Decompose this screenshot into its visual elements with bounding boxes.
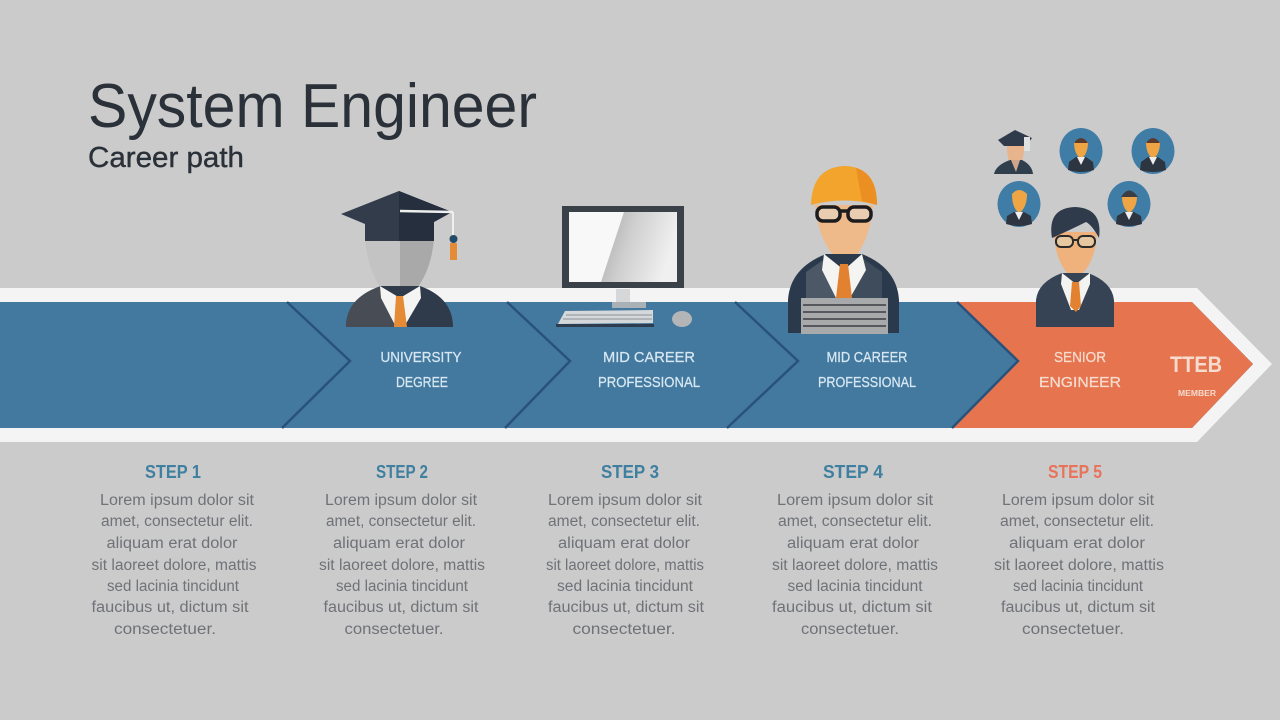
icon: team member 2 — [1132, 128, 1174, 174]
career path arrow — [0, 288, 1272, 442]
stage label: senior engineer: ENGINEER — [1039, 374, 1121, 391]
step 4 text: faucibus ut, dictum sit — [772, 599, 933, 616]
step 2 text — [319, 462, 485, 638]
step 3 text: faucibus ut, dictum sit — [548, 599, 705, 616]
step 3 text — [546, 462, 705, 638]
step 2 text: aliquam erat dolor — [333, 535, 465, 552]
icon: computer — [556, 206, 692, 327]
subtitle: Career path — [88, 142, 244, 174]
step 3 text: Lorem ipsum dolor sit — [548, 492, 703, 509]
step 4 text: sed lacinia tincidunt — [788, 578, 923, 595]
step 1 text: aliquam erat dolor — [106, 535, 238, 552]
stage label: university degree — [380, 349, 462, 391]
step 1 text: STEP 1 — [145, 462, 201, 482]
stage label: university degree: DEGREE — [396, 374, 448, 391]
stage label: senior engineer — [1039, 349, 1121, 391]
title: System Engineer — [88, 72, 537, 141]
stage label: university degree: UNIVERSITY — [380, 349, 462, 366]
step 2 text: STEP 2 — [376, 462, 428, 482]
step 3 text: consectetuer. — [572, 621, 676, 638]
step 5 text: STEP 5 — [1048, 462, 1102, 482]
step 1 text — [92, 462, 257, 638]
step 5 text: Lorem ipsum dolor sit — [1002, 492, 1155, 509]
step 1 text: consectetuer. — [114, 621, 216, 638]
step 3 text: aliquam erat dolor — [558, 535, 690, 552]
step 1 text: sit laoreet dolore, mattis — [92, 557, 257, 574]
step 3 text: STEP 3 — [601, 462, 659, 482]
stage label: mid career professional — [598, 349, 700, 391]
step 2 text: sed lacinia tincidunt — [336, 578, 469, 595]
step 4 text: consectetuer. — [801, 621, 899, 638]
stage label: mid career engineer: MID CAREER — [826, 349, 908, 366]
badge: top tier: TTEB — [1170, 352, 1222, 377]
step 2 text: Lorem ipsum dolor sit — [325, 492, 478, 509]
stage label: mid career engineer — [818, 349, 916, 391]
step 5 text: sed lacinia tincidunt — [1013, 578, 1144, 595]
step 3 text: amet, consectetur elit. — [548, 513, 700, 530]
step 2 text: consectetuer. — [344, 621, 444, 638]
icon: engineer with hard hat — [788, 166, 899, 334]
step 5 text — [994, 462, 1164, 638]
step 5 text: faucibus ut, dictum sit — [1001, 599, 1156, 616]
step 5 text: aliquam erat dolor — [1009, 535, 1145, 552]
step 1 text: amet, consectetur elit. — [101, 513, 253, 530]
icon: graduate — [341, 191, 458, 327]
step 4 text: amet, consectetur elit. — [778, 513, 932, 530]
step 1 text: faucibus ut, dictum sit — [92, 599, 249, 616]
step 5 text: amet, consectetur elit. — [1000, 513, 1154, 530]
step 5 text: consectetuer. — [1022, 621, 1124, 638]
step 5 text: sit laoreet dolore, mattis — [994, 557, 1164, 574]
step 4 text: aliquam erat dolor — [787, 535, 919, 552]
icon: team member 3 — [998, 181, 1040, 227]
stage label: mid career engineer: PROFESSIONAL — [818, 374, 916, 391]
step 1 text: sed lacinia tincidunt — [107, 578, 240, 595]
step 4 text: STEP 4 — [823, 462, 883, 482]
step 3 text: sed lacinia tincidunt — [557, 578, 694, 595]
icon: small graduate — [994, 130, 1033, 174]
stage label: mid career professional: MID CAREER — [603, 349, 695, 366]
step 2 text: amet, consectetur elit. — [326, 513, 476, 530]
step 1 text: Lorem ipsum dolor sit — [100, 492, 255, 509]
icon: senior engineer — [1036, 207, 1114, 327]
icon: team member 1 — [1060, 128, 1102, 174]
badge: top tier: MEMBER — [1178, 389, 1216, 398]
badge: top tier — [1170, 352, 1222, 398]
step 2 text: faucibus ut, dictum sit — [324, 599, 479, 616]
stage label: mid career professional: PROFESSIONAL — [598, 374, 700, 391]
step 4 text: Lorem ipsum dolor sit — [777, 492, 934, 509]
stage label: senior engineer: SENIOR — [1054, 349, 1106, 366]
step 4 text: sit laoreet dolore, mattis — [772, 557, 938, 574]
step 4 text — [772, 462, 938, 638]
icon: team member 4 — [1108, 181, 1150, 227]
step 3 text: sit laoreet dolore, mattis — [546, 557, 704, 574]
step 2 text: sit laoreet dolore, mattis — [319, 557, 485, 574]
